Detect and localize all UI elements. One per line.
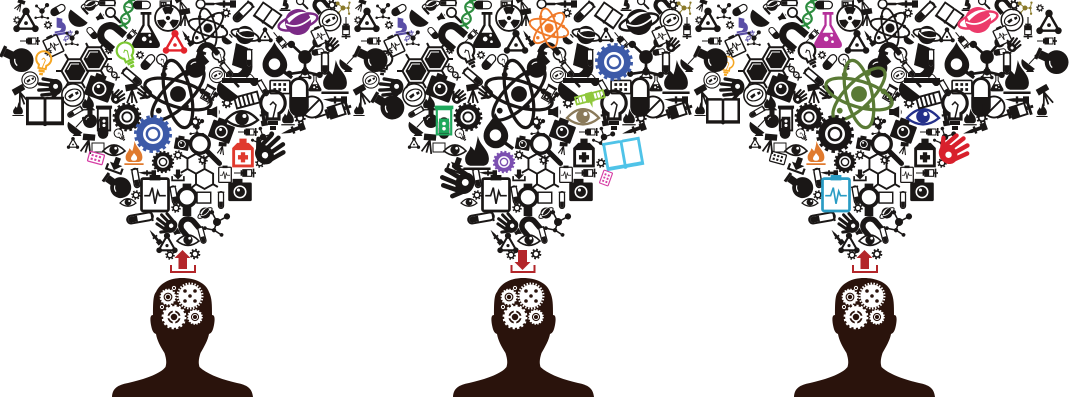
icon: triangle molecule [504, 30, 528, 54]
icon: blue eye [907, 109, 939, 124]
icon: bottle [914, 139, 936, 167]
icon: bulb [796, 40, 822, 71]
icon: hand [437, 164, 478, 203]
icon: open book [706, 98, 740, 124]
icon: ECG clipboard [482, 175, 510, 211]
icon: round flask left [691, 40, 731, 76]
icon: purple gear [494, 152, 514, 172]
icon: planet [618, 6, 660, 38]
icon: black flame [463, 136, 491, 170]
icon: atom top [869, 7, 911, 49]
icon: atom top [187, 7, 229, 49]
icon: open book [26, 97, 64, 126]
arrow down into tray [514, 250, 530, 270]
tray [512, 265, 534, 272]
icon: bulb [455, 40, 481, 71]
icon: black gear [818, 117, 852, 151]
icon: test strip [234, 92, 260, 108]
icon: drop with magnifier [484, 113, 514, 149]
icon: green atom [822, 58, 896, 130]
icon: blue ECG clipboard [822, 175, 850, 211]
head with gears [794, 278, 935, 397]
head with gears [112, 278, 253, 397]
icon: orange bulb [33, 50, 52, 77]
icon: pink keypad [599, 170, 613, 186]
icon: pink planet [957, 4, 999, 36]
icon: pink keypad [87, 151, 105, 165]
icon: red hand [932, 129, 972, 168]
icon: red triangle molecule [163, 30, 187, 54]
icon: round flask left [0, 40, 37, 76]
icon: blue book [602, 137, 645, 172]
icon: round flask [781, 168, 817, 202]
icon: flask [473, 12, 501, 48]
icon: round flask [99, 168, 135, 202]
panel: right head with science icons [691, 0, 1038, 397]
icon cluster: black science icons [693, 0, 1038, 259]
icon cluster: black science icons [352, 0, 696, 259]
arrow up above tray [856, 250, 872, 269]
icon: drop with magnifier [945, 42, 975, 78]
icon: purple planet [277, 6, 319, 38]
icon: magenta flask [814, 12, 842, 48]
icon: olive eye [567, 109, 599, 124]
tray [853, 265, 877, 272]
icon: large atom [482, 58, 556, 130]
icon: eye [226, 111, 258, 126]
icon cluster: black science icons [11, 0, 355, 259]
icon: flask [132, 12, 160, 48]
icon: round flask [367, 86, 409, 124]
icon: red bottle [232, 139, 254, 167]
icon: orange atom [528, 7, 570, 49]
panel: middle head with science icons [351, 0, 696, 397]
tray [171, 265, 195, 272]
icon: bulb [374, 50, 393, 77]
icon: blue gear [136, 117, 170, 151]
icon: keypad [769, 151, 787, 165]
icon: hand [247, 128, 288, 168]
icon: green satellite [575, 89, 607, 111]
icon: triangle molecule [845, 30, 869, 54]
icon: orange bulb [719, 56, 735, 77]
icon: test tube box [778, 106, 794, 130]
icon: test tube box [96, 106, 112, 130]
icon: round flask left [351, 40, 391, 76]
icon: gear [153, 152, 173, 172]
right edge icons [1032, 5, 1070, 117]
icon: green bulb [114, 40, 140, 71]
icon: test strip [916, 92, 942, 108]
icon: orange flame [806, 141, 826, 165]
icon: drop with magnifier [263, 42, 293, 78]
icon: bottle [573, 139, 595, 167]
head with gears [453, 278, 594, 397]
arrow up above tray [174, 250, 190, 269]
icon: green test tube box [435, 106, 453, 134]
panel: left head with science icons [0, 0, 356, 397]
icon: blue gear [597, 45, 631, 79]
icon: orange flame [124, 141, 144, 165]
icon: gear [835, 152, 855, 172]
icon: ECG clipboard [142, 175, 168, 211]
icon: large atom [141, 58, 215, 130]
